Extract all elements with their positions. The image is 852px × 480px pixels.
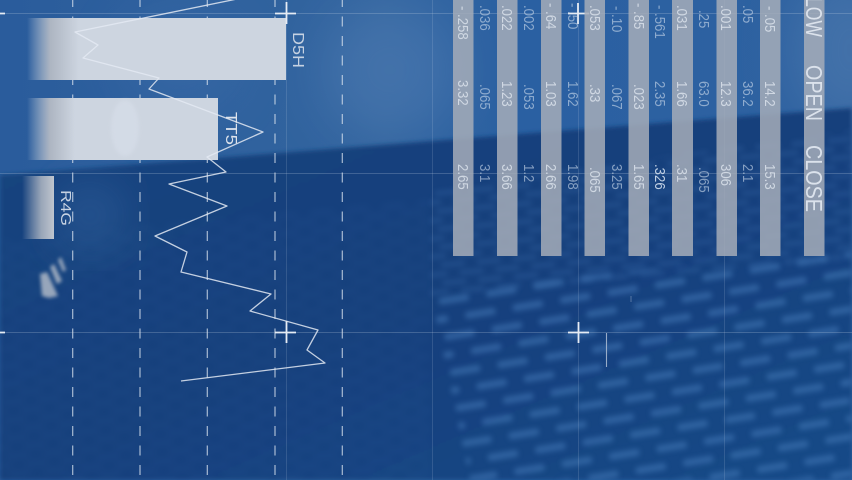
column 12 values bbox=[696, 10, 713, 193]
column 9 values: 1.65 bbox=[631, 164, 648, 190]
column 6 values: 1.98 bbox=[565, 164, 582, 190]
column 2 values: .036 bbox=[477, 5, 494, 31]
column 15 values: 14.2 bbox=[762, 81, 779, 107]
crosshair markers bbox=[0, 2, 589, 343]
column 10 values: .326 bbox=[652, 164, 669, 190]
column 4 values: .053 bbox=[521, 84, 538, 110]
column 11 values: .31 bbox=[674, 164, 691, 182]
column 14 values: 2.1 bbox=[740, 164, 757, 182]
bar: TT5 bbox=[27, 98, 218, 160]
column 12 values: 63.0 bbox=[696, 81, 713, 107]
column 6 values: 1.62 bbox=[565, 81, 582, 107]
column 8 values: 3.25 bbox=[609, 164, 626, 190]
column 8 values bbox=[609, 6, 626, 190]
line chart bbox=[75, 0, 325, 381]
column 13 values: .001 bbox=[718, 5, 735, 31]
dashed vertical grid lines bbox=[73, 0, 342, 480]
column 12 values: .065 bbox=[696, 167, 713, 193]
column 7 values: .065 bbox=[587, 167, 604, 193]
bar chart bbox=[22, 18, 306, 239]
column 14 values bbox=[740, 5, 757, 182]
column 5 values: 2.66 bbox=[543, 164, 560, 190]
column 11 values: 1.66 bbox=[674, 81, 691, 107]
column 10 values bbox=[652, 5, 669, 190]
column 10 values: 2.35 bbox=[652, 81, 669, 107]
column 15 values: 15.3 bbox=[762, 164, 779, 190]
bar: D5H bbox=[27, 18, 286, 80]
column 4 values: 1.2 bbox=[521, 164, 538, 182]
column 2 values bbox=[477, 5, 494, 182]
column 12 values: .25 bbox=[696, 10, 713, 28]
column 5 values bbox=[543, 3, 560, 190]
column 15 values: - .05 bbox=[762, 6, 779, 33]
label: R4G: R4G bbox=[57, 190, 74, 226]
column 1 values: 2.65 bbox=[455, 164, 472, 190]
column 13 values bbox=[718, 5, 735, 186]
column headers: CLOSE bbox=[801, 145, 827, 212]
column 5 values: - .64 bbox=[543, 3, 560, 30]
column 6 values bbox=[565, 3, 582, 190]
column 1 values: - .258 bbox=[455, 6, 472, 40]
column 9 values: .023 bbox=[631, 84, 648, 110]
column 3 values bbox=[499, 5, 516, 190]
bar: R4G bbox=[22, 176, 54, 239]
column 14 values: .05 bbox=[740, 5, 757, 23]
data columns bbox=[453, 0, 824, 256]
column 11 values: .031 bbox=[674, 5, 691, 31]
column 1 values bbox=[455, 6, 472, 190]
column 3 values: 1.23 bbox=[499, 81, 516, 107]
column 7 values: .053 bbox=[587, 5, 604, 31]
column 2 values: 3.1 bbox=[477, 164, 494, 182]
column 15 values bbox=[762, 6, 779, 190]
column 8 values: .067 bbox=[609, 84, 626, 110]
column 9 values: - .85 bbox=[631, 3, 648, 30]
column 4 values: .002 bbox=[521, 5, 538, 31]
column 5 values: 1.03 bbox=[543, 81, 560, 107]
column 8 values: - .10 bbox=[609, 6, 626, 33]
data table values bbox=[455, 0, 827, 212]
column 13 values: 306 bbox=[718, 164, 735, 186]
column headers bbox=[801, 0, 827, 212]
column 13 values: 12.3 bbox=[718, 81, 735, 107]
small blurred marks bbox=[40, 257, 66, 298]
column 3 values: 3.66 bbox=[499, 164, 516, 190]
column 6 values: - .50 bbox=[565, 3, 582, 30]
column headers: OPEN bbox=[801, 65, 827, 121]
small tick marks bbox=[606, 296, 631, 367]
column 14 values: 36.2 bbox=[740, 81, 757, 107]
column 9 values bbox=[631, 3, 648, 190]
column 3 values: .022 bbox=[499, 5, 516, 31]
column 10 values: - .561 bbox=[652, 5, 669, 39]
column 4 values bbox=[521, 5, 538, 182]
label: D5H: D5H bbox=[289, 32, 306, 68]
column 2 values: .065 bbox=[477, 84, 494, 110]
label: TT5: TT5 bbox=[222, 112, 239, 145]
bar highlight bbox=[111, 100, 139, 156]
column 1 values: 3.32 bbox=[455, 80, 472, 106]
column 11 values bbox=[674, 5, 691, 182]
column 7 values bbox=[587, 5, 604, 193]
column 7 values: .33 bbox=[587, 84, 604, 102]
